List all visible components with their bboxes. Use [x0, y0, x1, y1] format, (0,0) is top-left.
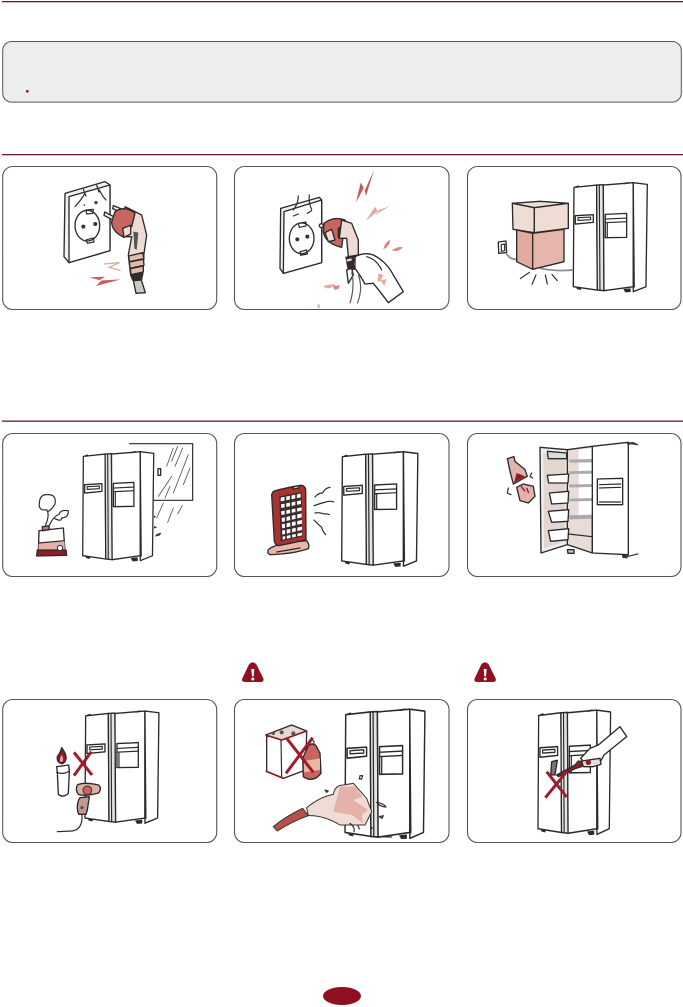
illustration: window with rain: [129, 444, 193, 537]
illustration: candle and hair dryer with cross: [57, 748, 100, 832]
illustration: can, bottle and cross: [266, 725, 392, 837]
illustration: box crushing the cord: [498, 201, 573, 284]
illustration: fridge: [538, 709, 611, 835]
panel: candle and hair dryer: [3, 700, 217, 842]
notice box: [3, 42, 681, 102]
panel: plug with loose socket: [3, 166, 217, 310]
panel: humidifier and water: [3, 434, 217, 576]
panel: heavy box on cord: [468, 166, 681, 310]
illustration: fridge: [83, 451, 154, 561]
panel: flammables and water spray: [234, 700, 449, 842]
warning icon 1: [242, 662, 264, 682]
panel: heater beside fridge: [234, 434, 449, 576]
illustration: fridge: [345, 708, 425, 839]
illustration: open fridge: [507, 442, 638, 558]
panel: tool on fridge: [468, 700, 681, 842]
illustration: socket and sparking plug: [64, 182, 147, 293]
warning icon 2: [474, 662, 496, 682]
panel: fridge open with food: [468, 434, 681, 576]
illustration: hand with tool and cross: [545, 727, 627, 798]
illustration: fridge: [573, 182, 647, 292]
page number badge: [323, 987, 361, 1005]
illustration: fridge: [342, 451, 418, 567]
illustration: humidifier with steam: [37, 495, 68, 556]
illustration: socket, hand and lightning: [280, 170, 403, 309]
section rule 1: [2, 154, 683, 155]
illustration: fridge: [85, 710, 159, 824]
panel: wet hands on plug: [234, 166, 449, 310]
notice bullet: [26, 90, 29, 93]
illustration: heater with heat waves: [268, 485, 334, 555]
top rule: [2, 1, 683, 2]
section rule 2: [2, 420, 683, 422]
